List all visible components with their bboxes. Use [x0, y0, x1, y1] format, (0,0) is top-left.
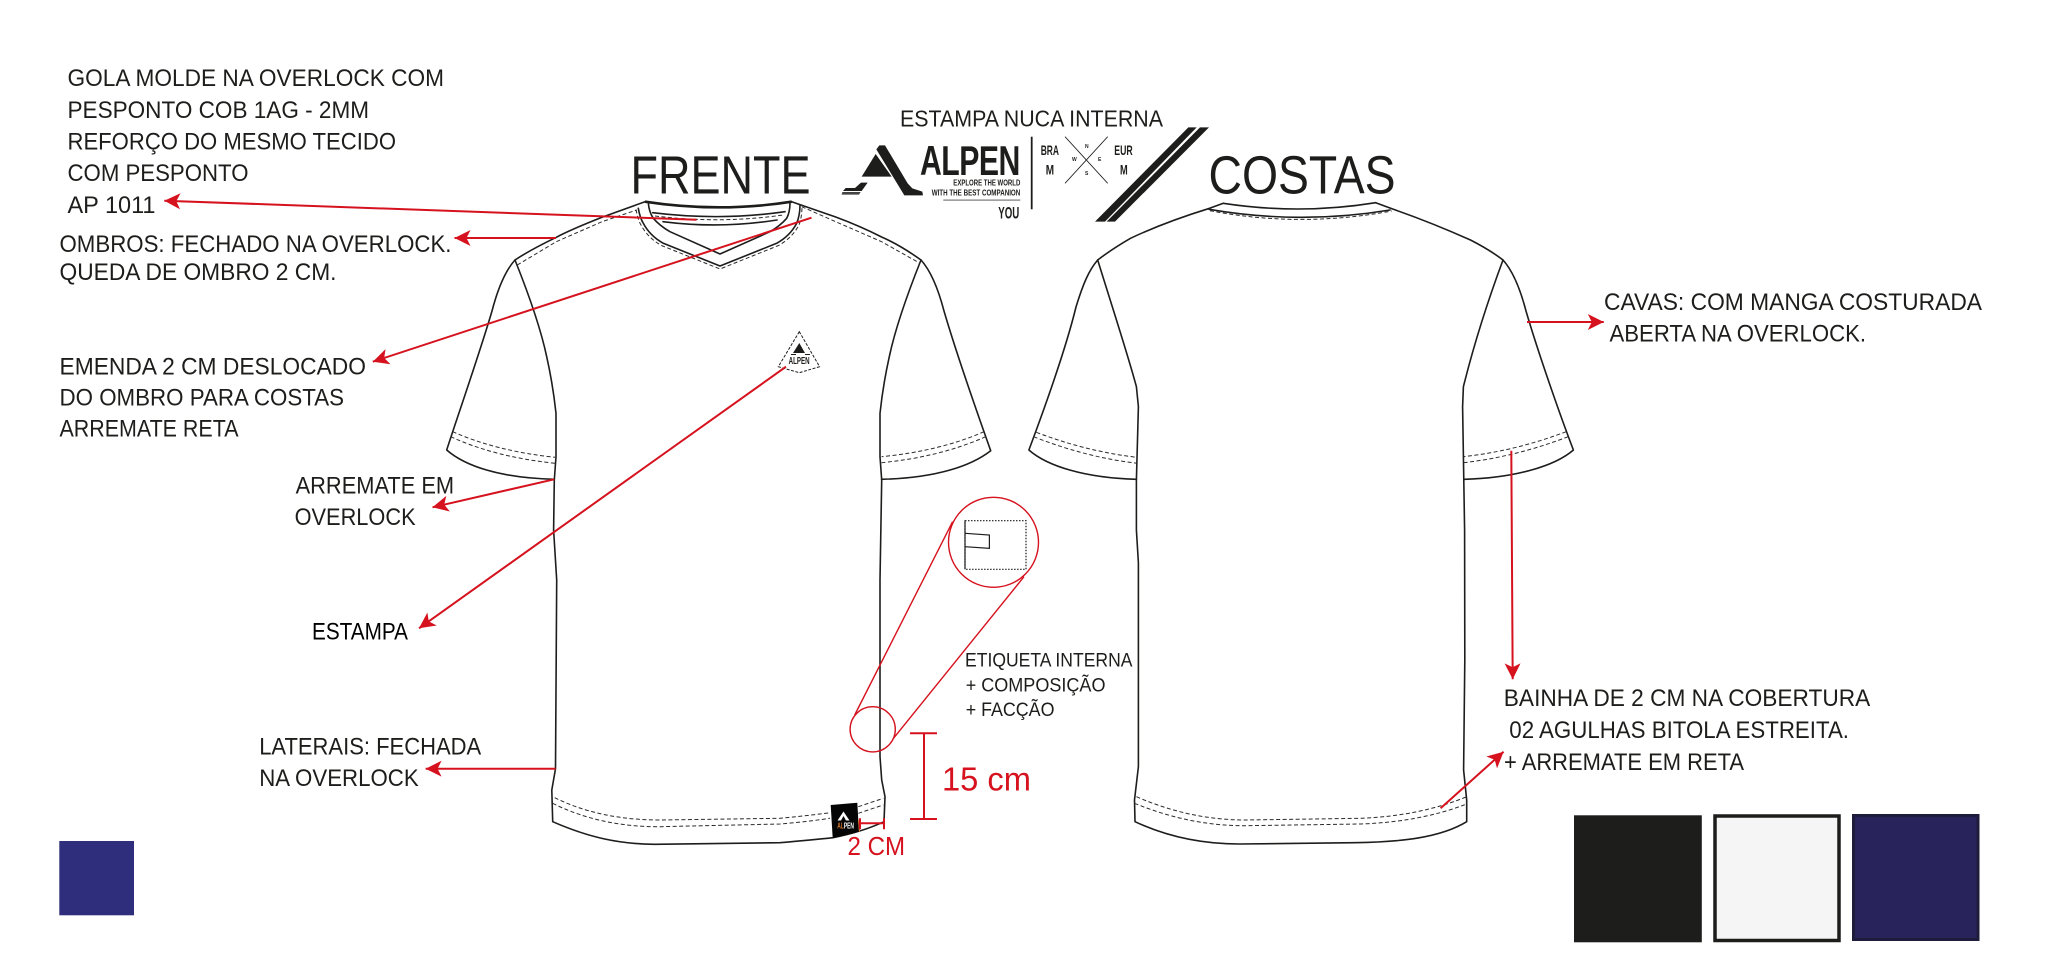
logo wordmark: ALPEN: [920, 137, 1020, 184]
mini mountain mark: [791, 343, 810, 355]
hem stitches: [553, 798, 883, 827]
label sketch: [965, 533, 989, 548]
neck print logo: [842, 127, 1209, 222]
text: bainha: [1504, 685, 1870, 776]
swatch: white: [1715, 816, 1839, 940]
front body outline: [515, 202, 921, 844]
inner neck stitches: [655, 215, 783, 220]
swatch: blue square: [59, 841, 134, 915]
logo compass cross: [1065, 137, 1108, 183]
mountain left foot: [843, 183, 868, 191]
text: laterais: [259, 733, 481, 792]
logo left code: [1041, 142, 1059, 177]
size m right: M: [1120, 161, 1128, 177]
front right sleeve: [882, 260, 991, 479]
gola line 4: COM PESPONTO: [68, 160, 248, 187]
arremate line 2: OVERLOCK: [295, 504, 416, 531]
label wordmark: ALPEN: [837, 821, 854, 830]
collar inner edge: [648, 203, 790, 254]
back neck seam: [1209, 209, 1390, 217]
large circle: [948, 497, 1038, 587]
mountain diagonal: [876, 145, 923, 195]
emenda line 3: ARREMATE RETA: [60, 416, 238, 443]
panel: front t-shirt: [447, 202, 991, 844]
hem label: [831, 803, 860, 838]
collar stitching: [636, 206, 802, 269]
logo tagline two: WITH THE BEST COMPANION: [932, 188, 1020, 198]
compass e: E: [1098, 157, 1102, 163]
size m left: M: [1046, 161, 1054, 177]
swatch: black: [1574, 815, 1702, 942]
label base: [831, 803, 859, 838]
bainha line 2: 02 AGULHAS BITOLA ESTREITA.: [1509, 717, 1849, 744]
mountain triangle: [862, 154, 892, 177]
arrow: gola: [164, 201, 697, 220]
back neck stitches: [1210, 211, 1392, 219]
ombros line 2: QUEDA DE OMBRO 2 CM.: [60, 259, 336, 286]
heading: estampa nuca interna: ESTAMPA NUCA INTERNA: [900, 105, 1164, 131]
gola line 1: GOLA MOLDE NA OVERLOCK COM: [68, 65, 444, 92]
stripe one: [1095, 127, 1197, 222]
compass w: W: [1072, 157, 1077, 163]
etiqueta line 3: + FACÇÃO: [966, 697, 1054, 721]
label edge: [858, 820, 860, 832]
compass s: S: [1085, 171, 1089, 177]
emenda line 2: DO OMBRO PARA COSTAS: [60, 384, 344, 411]
logo diagonal stripes: [1095, 127, 1209, 222]
arrow: arremate: [432, 479, 554, 507]
heading: costas: COSTAS: [1208, 146, 1396, 206]
back left sleeve: [1029, 260, 1136, 479]
eur: EUR: [1114, 142, 1133, 158]
logo right code: [1114, 142, 1133, 177]
dimension: 15 cm: [910, 733, 1031, 819]
logo tagline one: EXPLORE THE WORLD: [953, 177, 1020, 187]
shoulder stitches: [517, 207, 920, 265]
label mark: [838, 812, 850, 820]
text: estampa: ESTAMPA: [312, 618, 408, 645]
emenda line 1: EMENDA 2 CM DESLOCADO: [60, 353, 366, 380]
text: arremate em overlock: [295, 472, 454, 531]
arrow: cavas: [1527, 321, 1604, 323]
logo divider: [1031, 137, 1033, 209]
arrow: emenda: [373, 218, 812, 362]
back right sleeve: [1465, 260, 1573, 479]
etiqueta line 2: + COMPOSIÇÃO: [966, 672, 1106, 696]
back body outline: [1098, 203, 1503, 844]
arrow: ombros: [454, 237, 556, 239]
2 cm value: 2 CM: [848, 831, 905, 861]
gola line 3: REFORÇO DO MESMO TECIDO: [68, 128, 396, 155]
logo mark: [842, 145, 923, 195]
bainha line 1: BAINHA DE 2 CM NA COBERTURA: [1504, 685, 1870, 712]
neck edge: [964, 521, 966, 569]
logo you: YOU: [998, 203, 1019, 222]
small circle: [850, 707, 895, 752]
back sleeve stitches: [1034, 432, 1568, 463]
mountain left foot stripe: [842, 192, 861, 195]
tangent lines: [855, 522, 1024, 738]
swatch: navy: [1854, 816, 1978, 940]
15 cm bracket: [910, 733, 937, 819]
stripe two: [1107, 127, 1209, 222]
inner neck tape: [653, 212, 785, 225]
laterais line 1: LATERAIS: FECHADA: [259, 733, 481, 760]
back neckline: [1223, 203, 1376, 209]
arrow: estampa: [419, 367, 786, 628]
panel: back t-shirt: [1029, 203, 1573, 844]
sleeve stitches: [451, 432, 986, 463]
neckline: [645, 202, 792, 207]
gola line 2: PESPONTO COB 1AG - 2MM: [68, 97, 369, 124]
laterais line 2: NA OVERLOCK: [259, 765, 419, 792]
text: emenda: [60, 353, 366, 443]
text: cavas: [1604, 289, 1982, 348]
arrow: laterais: [426, 768, 556, 770]
chest print: [778, 332, 820, 373]
bra: BRA: [1041, 142, 1059, 158]
cavas line 2: ABERTA NA OVERLOCK.: [1610, 321, 1866, 348]
front left sleeve: [447, 260, 554, 479]
callout: internal label magnifier: [850, 497, 1038, 752]
arrow: sleeve hem: [1511, 451, 1513, 679]
gola line 5: AP 1011: [68, 192, 156, 219]
dotted collar area: [965, 521, 1026, 569]
compass n: N: [1085, 144, 1089, 150]
dashed badge: [778, 332, 820, 373]
text: ombros: [60, 231, 452, 286]
arremate line 1: ARREMATE EM: [296, 472, 454, 499]
15 cm value: 15 cm: [942, 761, 1031, 798]
bainha line 3: + ARREMATE EM RETA: [1504, 749, 1744, 776]
heading: frente: FRENTE: [630, 146, 810, 205]
collar outer edge: [638, 205, 800, 266]
logo rule: [943, 200, 1020, 201]
cavas line 1: CAVAS: COM MANGA COSTURADA: [1604, 289, 1982, 316]
back hem stitches: [1134, 797, 1467, 826]
etiqueta line 1: ETIQUETA INTERNA: [965, 650, 1132, 672]
text: gola: [68, 65, 444, 219]
ombros line 1: OMBROS: FECHADO NA OVERLOCK.: [60, 231, 452, 258]
dimension: 2 cm: [848, 818, 905, 861]
arrow: body hem: [1441, 752, 1504, 808]
text: etiqueta interna: [965, 650, 1132, 721]
badge wordmark: ALPEN: [789, 355, 810, 367]
2 cm bracket: [860, 818, 884, 829]
cross lines: [1065, 137, 1108, 183]
